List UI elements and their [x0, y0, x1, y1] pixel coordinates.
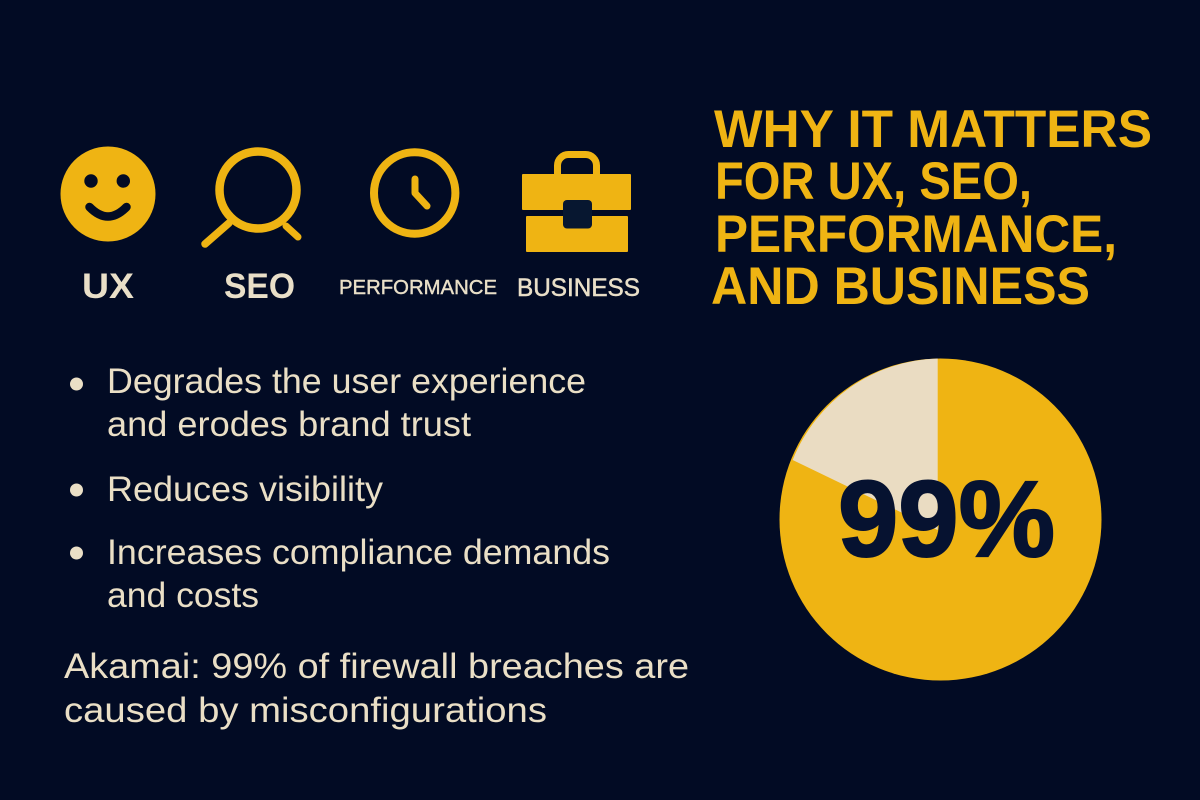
label: BUSINESS: BUSINESS — [517, 274, 640, 302]
icon: briefcase (Business) — [522, 154, 631, 252]
bullet: compliance: Increases compliance demands — [107, 532, 610, 572]
heading: PERFORMANCE, — [715, 205, 1117, 264]
pie chart: 99%: 99% — [838, 458, 1055, 579]
panel: icon row — [60, 146, 640, 306]
heading: AND BUSINESS — [711, 257, 1090, 316]
icon: magnifying glass (SEO) — [205, 152, 298, 244]
heading — [711, 100, 1152, 316]
bullet: user experience: Degrades the user experience — [107, 361, 586, 401]
callout: Akamai statistic: caused by misconfigurations — [64, 690, 547, 730]
callout: Akamai statistic: Akamai: 99% of firewall breaches are — [64, 646, 689, 686]
bullet: user experience — [70, 361, 586, 444]
bullet: compliance: and costs — [107, 575, 259, 615]
bullet list — [70, 361, 610, 615]
label: SEO: SEO — [224, 267, 295, 306]
label: UX: UX — [82, 267, 135, 306]
callout: Akamai statistic — [64, 646, 689, 730]
heading: FOR UX, SEO, — [715, 152, 1032, 211]
icon: clock (Performance) — [374, 152, 455, 234]
bullet: visibility: Reduces visibility — [107, 469, 383, 509]
heading: WHY IT MATTERS — [714, 100, 1152, 159]
label: PERFORMANCE: PERFORMANCE — [339, 276, 497, 299]
pie chart: 99% — [780, 358, 1102, 680]
bullet: user experience: and erodes brand trust — [107, 404, 471, 444]
bullet: compliance — [70, 532, 610, 615]
icon: smiley face (UX) — [60, 146, 156, 242]
